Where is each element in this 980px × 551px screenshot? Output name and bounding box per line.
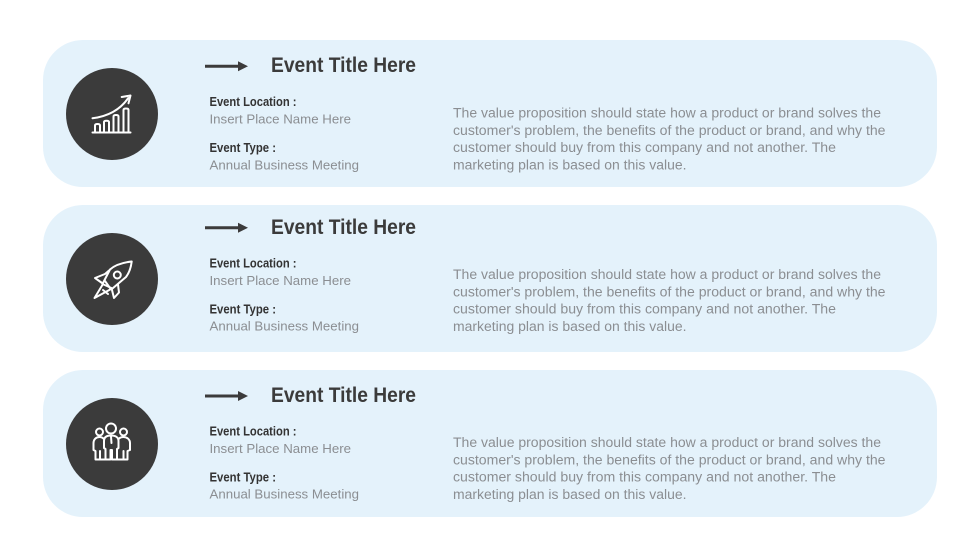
description 3: customer's problem, the benefits of the product or brand, and why the (453, 452, 886, 467)
panel background 2 (43, 205, 937, 352)
panel: event 1 (43, 40, 937, 187)
event location 2: Event Location : (210, 256, 296, 270)
event location 1: Insert Place Name Here (210, 112, 351, 126)
description 1: customer's problem, the benefits of the product or brand, and why the (453, 123, 886, 138)
event type 1: Annual Business Meeting (210, 158, 359, 172)
description 1: The value proposition should state how a product or brand solves the (453, 106, 881, 120)
description 1: marketing plan is based on this value. (453, 158, 686, 172)
arrow 2 (205, 223, 248, 233)
panel: event 2 (43, 205, 937, 352)
event type 3: Event Type : (210, 470, 276, 484)
description 2 (453, 267, 886, 334)
icon: team (66, 398, 158, 490)
icon: rocket (66, 233, 158, 325)
event type 2: Event Type : (210, 302, 276, 316)
event type 2 (210, 302, 359, 334)
panel: event 3 (43, 370, 937, 517)
event location 1: Event Location : (210, 95, 296, 109)
event type 3 (210, 470, 359, 502)
event location 2: Insert Place Name Here (210, 273, 351, 288)
description 3: The value proposition should state how a product or brand solves the (453, 435, 881, 450)
description 2: The value proposition should state how a product or brand solves the (453, 267, 881, 282)
event location 2 (210, 256, 351, 288)
event location 3: Insert Place Name Here (210, 441, 351, 456)
event location 3 (210, 424, 351, 456)
event type 2: Annual Business Meeting (210, 318, 359, 334)
panel background 1 (43, 40, 937, 187)
description 2: customer should buy from this company and not another. The (453, 302, 836, 316)
event location 1 (210, 95, 351, 126)
event type 1: Event Type : (210, 141, 276, 155)
description 3: customer should buy from this company and not another. The (453, 470, 836, 484)
arrow 3 (205, 391, 248, 401)
description 2: customer's problem, the benefits of the product or brand, and why the (453, 284, 886, 299)
description 1 (453, 106, 886, 172)
icon: growth chart (66, 68, 158, 160)
description 2: marketing plan is based on this value. (453, 319, 686, 334)
event title 2: Event Title Here (271, 216, 416, 239)
event type 1 (210, 141, 359, 172)
event type 3: Annual Business Meeting (210, 486, 359, 502)
event title 3: Event Title Here (271, 384, 416, 407)
description 1: customer should buy from this company and not another. The (453, 140, 836, 155)
event location 3: Event Location : (210, 424, 296, 438)
description 3: marketing plan is based on this value. (453, 487, 686, 502)
arrow 1 (205, 61, 248, 71)
panel background 3 (43, 370, 937, 517)
event title 1: Event Title Here (271, 54, 416, 77)
description 3 (453, 435, 886, 502)
